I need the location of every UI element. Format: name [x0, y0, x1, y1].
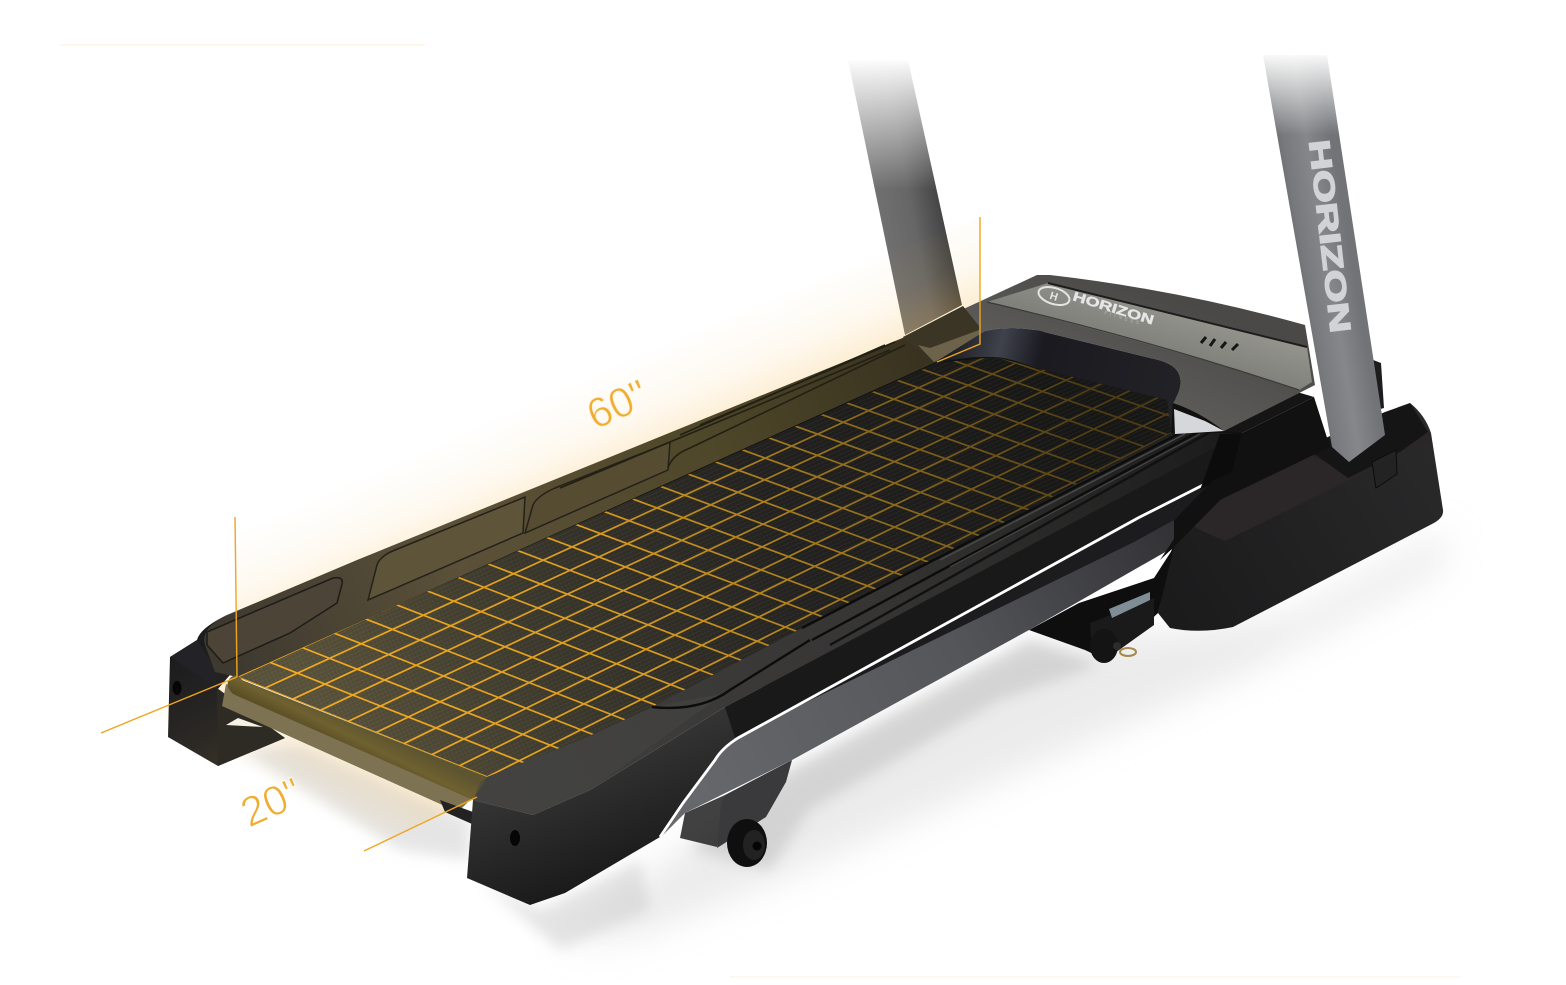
rear base housing	[1158, 358, 1443, 631]
left side rail	[204, 337, 945, 677]
right upright post	[1250, 40, 1385, 462]
rail top surface	[473, 433, 1242, 815]
console sub brand: FITNESS	[1103, 310, 1140, 327]
post collar	[1305, 403, 1428, 478]
console brand text: HORIZON	[1071, 289, 1156, 327]
rail panel 3	[525, 442, 670, 533]
left upright post	[835, 40, 975, 335]
console	[903, 275, 1330, 560]
rail panel 1	[207, 578, 342, 663]
console band	[987, 283, 1312, 390]
console logo: H	[1048, 290, 1059, 304]
dark band under stripe	[770, 480, 1213, 720]
front caster	[680, 760, 792, 867]
console vents	[1201, 337, 1238, 350]
white stripe	[660, 480, 1213, 837]
label: 60 inches length: 60"	[580, 370, 655, 438]
right side rail and front cap	[467, 430, 1242, 905]
rear wheel	[1090, 629, 1118, 663]
deck backing	[237, 330, 1242, 800]
rail side face	[467, 433, 1242, 905]
base top pad	[1181, 433, 1431, 541]
cap screw	[510, 830, 520, 846]
base latch	[1372, 450, 1397, 488]
notch	[226, 718, 263, 727]
rear foot and leveller	[1029, 547, 1174, 663]
belt	[238, 358, 1171, 777]
console logo	[1036, 284, 1072, 308]
rail grooves	[560, 342, 905, 488]
belt grid	[238, 358, 1171, 777]
white glint	[1174, 409, 1224, 434]
under-deck metal bar	[222, 684, 480, 824]
length dimension plane glow	[235, 217, 980, 677]
arch inner edge	[937, 328, 1181, 432]
far rail side shade	[725, 433, 1242, 738]
rail end	[1200, 433, 1242, 490]
dimension lines	[101, 217, 980, 851]
rail grooves right	[652, 430, 1210, 708]
screw	[172, 681, 182, 695]
floor shadow	[240, 530, 1450, 950]
warning label	[1109, 592, 1150, 618]
front belt roller	[228, 675, 487, 800]
left post plate	[903, 306, 979, 362]
underside beam	[660, 480, 1213, 838]
rail panel 2	[368, 497, 525, 600]
left front end cap	[168, 615, 285, 766]
post brand text: HORIZON	[1302, 138, 1356, 335]
label: 20 inches width: 20"	[234, 768, 309, 836]
rail bevel	[473, 693, 725, 815]
width dimension plane glow	[101, 677, 477, 851]
caster wheel	[727, 819, 767, 867]
